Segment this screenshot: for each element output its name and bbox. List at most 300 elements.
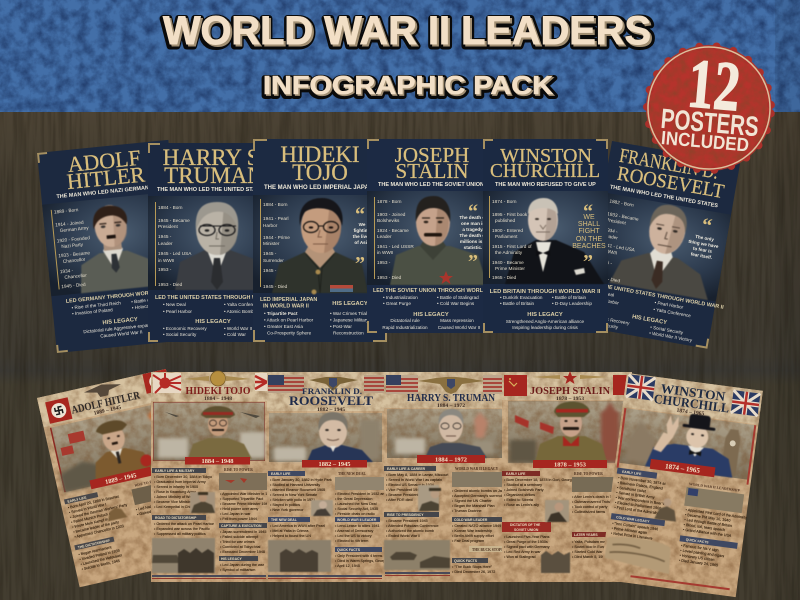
timeline: the Admiralty [495,250,523,255]
campaigns and legacy [583,281,724,347]
poster years: 1889 – 1945 [93,405,122,417]
poster name: ROOSEVELT [289,393,373,408]
medal ribbons [330,285,353,292]
flag: Soviet right [613,375,629,395]
campaigns and legacy: LED THE SOVIET UNION THROUGH WORLD WAR II [373,288,506,294]
timeline: 1934 - [60,268,74,274]
quote: a tragedy. [462,227,484,232]
small portrait [311,500,333,516]
poster title [163,145,265,188]
timeline: Surrender [263,258,284,263]
timeline: 1882 - Born [609,199,634,208]
right column text: • Social Security Act, 1935 [335,507,378,511]
group photo [152,538,215,573]
timeline: 1889 - Born [54,207,79,215]
poster name: FRANKLIN D. [302,386,362,396]
timeline: 1945 - [263,251,277,256]
right column text: • Led through Battle of Britain [684,518,732,528]
group photo [541,551,570,573]
badge number: 12 [685,45,743,126]
left column text: • Won at Stalingrad [504,555,536,559]
left column text: • Launched Five-Year Plans [504,535,550,539]
timeline: in WWII [158,258,174,263]
poster title: CHURCHILL [490,160,600,182]
right column text: • Symbol of militarism [220,568,255,572]
left column text: • Served in New York Senate [270,493,317,497]
portrait [645,409,740,478]
right column text: • After Lenin's death in 1924 [572,495,618,499]
subtitle: INFOGRAPHIC PACK [263,70,553,100]
left column text: • Born January 30, 1882 in Hyde Park [270,478,332,482]
timeline: in WWII [600,248,617,256]
left column text: SOVIET UNION [514,528,539,532]
timeline: 1945 - Became [158,218,190,223]
portrait [505,198,604,284]
date ribbon [650,459,715,477]
timeline [51,206,95,290]
scene [508,401,626,463]
poster name [653,380,732,416]
poster tagline: THE MAN WHO LED THE UNITED STATES [609,184,719,209]
campaigns and legacy: IN WORLD WAR II [263,304,309,310]
footer stripe [152,575,266,579]
campaigns and legacy: HIS LEGACY [631,314,668,326]
timeline: 1941 - Led USA [601,242,636,253]
right column text: • Appointed First Lord of the Admiralty [685,508,747,520]
poster title: TOJO [292,160,348,185]
timeline: 1924 - Became [377,228,409,233]
poster years: 1882 – 1945 [317,407,345,413]
left column text: • Joined Bolshevik Party [504,488,544,492]
campaigns and legacy: • Pearl Harbor [163,309,192,314]
left column text: • Joined Ministry of War [154,495,193,499]
left column text: • Exiled to Siberia [504,498,534,502]
campaigns and legacy: Dictatorial rule [390,318,420,323]
timeline: Nazi Party [61,242,84,249]
date ribbon: 1882 – 1945 [319,461,350,468]
timeline: Harbor [263,223,278,228]
campaigns and legacy: Reconstruction [333,330,364,336]
right column text: • Loved painting and cigars [680,548,725,558]
right column text: • Korean War leadership [452,529,492,533]
left column text: • Expanded war across the Pacific [154,527,210,531]
right column text: • Honorary US citizen [679,553,715,562]
campaigns and legacy [66,288,179,342]
timeline: Leader [158,241,173,246]
left column text: • New York governor [270,508,304,512]
right column text: • April 12, 1945 [335,564,360,568]
poster title [490,145,600,182]
portrait [307,412,373,462]
left column text: • Served in World War I as captain [386,478,442,482]
right column text: • Led Japan in war [220,512,251,516]
poster title: JOSEPH [395,143,469,167]
campaigns and legacy: • Greater East Asia [264,324,303,329]
poster: Joseph Stalin parchment [502,371,632,582]
timeline: 1900 - Entered [492,228,523,233]
poster: Hideki Tojo parchment [151,371,273,582]
timeline [155,202,192,287]
poster tagline: THE MAN WHO LED THE SOVIET UNION [378,182,484,188]
right column text: • Became PM May 10, 1940 [685,513,731,523]
left column text: • Born November 30, 1874 at [618,476,666,486]
timeline: 1945 - [599,259,613,266]
left column text: • Led America in WWII after Pearl [270,524,325,528]
campaigns and legacy: LED THE UNITED STATES THROUGH WORLD WAR II [155,295,291,301]
campaigns and legacy: • Battle of Britain [500,301,534,306]
right column text: • Led Japan during the war [220,563,265,567]
campaigns and legacy: • New Deal [163,302,186,307]
timeline: 1944 - Prime [263,235,290,240]
timeline: 1945 - Died [596,274,621,284]
timeline: 1953 - Died [158,282,183,287]
left column text: • Vice President 1945 [386,488,421,492]
date ribbon [89,467,152,489]
right column text: • Blood, toil, tears speech [683,523,725,532]
right column text: • Grand Alliance with the USA [683,528,732,538]
poster: Adolf Hitler dark [37,140,188,353]
right column text: RISE TO POWER [574,472,603,476]
poster title: HIDEKI [280,142,360,167]
right column text: • Executed December 1948 [220,550,265,554]
campaigns and legacy: HIS LEGACY [527,312,563,318]
early life column: • Became leader of the party [73,520,119,534]
right column text: • Died January 24, 1965 [679,558,718,568]
right column text: QUICK FACTS [454,559,478,563]
campaigns and legacy: • Tripartite Pact [264,311,298,316]
left column text: • Helped to found the UN [270,534,311,538]
early life column: • Joined the German Workers' Party [70,503,128,520]
campaigns and legacy: • Atomic Bomb [224,309,254,314]
soviet star [439,271,453,284]
scene [50,401,183,492]
timeline: 1915 - First Lord of [492,244,532,249]
left column text: • First Lord of the Admiralty [614,506,659,515]
left column text: • Born December 30, 1884 in Tokyo [154,475,212,479]
timeline: 1920 - Founded [57,235,90,243]
timeline: 1941 - Led USSR [377,244,414,249]
right column text: • Died March 5, 1953 [572,555,606,559]
poster tagline: THE MAN WHO LED THE UNITED STATES [157,187,267,193]
poster tagline: THE MAN WHO LED IMPERIAL JAPAN [264,185,373,191]
left column text [502,471,576,559]
right column text: • Led the US to victory [335,534,372,538]
timeline: published [495,218,515,223]
campaigns and legacy: Inspiring leadership during crisis [512,325,579,330]
right column text [219,468,273,572]
left column text: • Attended Potsdam Conference [386,524,439,528]
campaigns and legacy: • Social Security [163,332,197,337]
campaigns and legacy: • Attack on Pearl Harbor [264,318,314,322]
right column text: • Soviet bloc in Europe [572,545,609,549]
left column text: • Ended World War II [386,534,420,538]
quote: one man is [461,221,485,226]
date ribbon [533,460,607,468]
timeline: 1945 - Led USA [158,251,192,256]
star emblem [532,371,608,384]
right column text: • Died in Warm Springs, Georgia [335,559,389,563]
right column text: • the Great Depression [335,497,372,501]
left column text: • Sandhurst cadet [617,486,646,493]
right column text: • Japan surrendered in 1945 [220,530,266,534]
quote: millions is a [460,239,487,244]
campaigns and legacy: • Holocaust [132,303,156,310]
right column text: RISE TO POWER [224,468,253,472]
portrait [535,402,607,462]
timeline [374,197,414,280]
timeline: 1953 - [158,267,172,272]
left column text: • War correspondent in Boer War [615,496,670,507]
right column text: • Supported Tripartite Pact [220,497,263,501]
left column text: • Became President [386,493,418,497]
portrait [188,406,252,459]
timeline: 1884 - Born [158,205,183,210]
right column text: • Created NATO alliance 1949 [452,524,501,528]
left column text: • Served in British Army [616,491,655,500]
left column text: EARLY LIFE & MILITARY [155,469,195,473]
right column text: • Truman Doctrine [452,509,482,513]
imperial emblem [184,371,251,386]
campaigns and legacy: • Battle of Stalingrad [437,295,479,300]
timeline: 1940 - Became [492,260,524,265]
quote: fighting [354,228,371,233]
campaigns and legacy: • New Deal [591,289,615,298]
poster title: FRANKLIN D. [618,145,720,184]
right column text [572,472,622,559]
footer stripe [268,575,382,579]
left column text: • Stayed in politics [270,503,300,507]
campaigns and legacy: • Yalta Conference [224,302,262,307]
timeline: Chancellor [63,257,86,264]
left column text: • Graduated from Imperial Army [154,480,206,484]
right column text: • Arsenal of Democracy [335,529,374,533]
campaigns and legacy [155,295,291,337]
left column text: EARLY LIFE [506,472,526,476]
campaigns and legacy: • Pearl Harbor [654,300,684,310]
badge words: POSTERS [660,103,760,142]
quote: “ [468,201,478,223]
poster: Winston Churchill parchment [600,373,764,597]
footer stripe [385,572,450,576]
subtitle: INFOGRAPHIC PACK [263,72,555,102]
date ribbon: 1878 – 1953 [554,462,586,468]
scene [269,413,382,462]
portrait [83,414,156,485]
left column text: • Authorized the atomic bomb [386,529,434,533]
campaigns and legacy: HIS LEGACY [195,319,231,325]
poster name [289,386,373,408]
left column text: • Suppressed all military politics [154,532,206,536]
timeline [489,196,532,280]
campaigns and legacy: Mass repression [440,318,474,323]
quote: The only [695,234,715,242]
timeline: Leader [377,234,392,239]
left column text: EARLY LIFE & CAREER [387,467,426,471]
left column text: • Elected US Senator in 1934 [386,483,434,487]
flag: American left [268,375,304,393]
campaigns and legacy [260,297,370,336]
timeline: 1965 - Died [492,275,517,280]
right column text: COLD WAR LEADER [454,518,488,522]
right column text: • Elected to 4th term [335,539,368,543]
left column text: • Became Vice Minister [154,500,193,504]
left column text: • Born May 8, 1884 in Lamar, Missouri [386,473,449,477]
campaigns and legacy: • Pearl Harbor [590,296,620,306]
campaigns and legacy: HIS LEGACY [332,301,368,307]
portrait [390,196,487,285]
quote [572,201,606,273]
campaigns and legacy [490,289,601,330]
right column text: • Appointed War Minister in 1940 [220,492,273,496]
timeline: 1933 - Became [607,211,639,222]
right column text: • Collectivized farms [572,510,605,514]
scene [387,409,502,458]
poster title: WINSTON [500,145,592,167]
left column text: • Nobel Prize in Literature [611,531,653,541]
poster: Winston Churchill dark [483,139,608,333]
right column text: • Only President with 4 terms [335,554,383,558]
quote: The death of [459,233,487,238]
quote: thing we have [688,239,719,249]
campaigns and legacy: HIS LEGACY [413,312,449,318]
poster name: JOSEPH STALIN [530,386,610,397]
campaigns and legacy: LED THE UNITED STATES THROUGH WORLD WAR II [589,281,724,311]
eagle emblem [309,377,358,391]
poster years: 1884 – 1972 [437,403,465,409]
poster: Adolf Hitler parchment [37,369,208,587]
left column text [152,468,215,536]
right column text: • Fair Deal program [452,539,484,543]
quote: ” [583,251,593,273]
quote: statistic. [464,245,482,250]
poster title [64,145,146,194]
flag: right swastika banner [142,369,170,394]
title: WORLD WAR II LEADERS [163,11,653,55]
early life column: • Launched the Holocaust [80,553,122,566]
quote: WE [583,214,595,221]
right column text: THE BUCK STOPS [472,548,503,552]
left column text [268,471,332,538]
left column text: • "Iron Curtain" speech 1946 [612,521,658,531]
flag: American right [483,375,502,394]
quote: the lives [353,234,372,239]
left column text: EARLY LIFE [271,472,291,476]
early life column: • Appointed Chancellor in 1933 [74,524,124,539]
poster title: TRUMAN [164,163,264,188]
poster title: ADOLF [66,145,142,177]
left column text: EARLY LIFE [622,470,642,476]
poster title [395,143,469,183]
timeline [260,199,290,289]
flag: American left [386,375,418,394]
timeline: 1941 - Pearl [263,216,289,221]
left column text: • Studied at Harvard University [270,483,320,487]
poster: Franklin Roosevelt parchment [267,372,389,582]
poster name: HARRY S. TRUMAN [407,393,496,404]
timeline: 1945 - [158,234,172,239]
right column text: QUICK FACTS [685,538,710,545]
campaigns and legacy: • Cold War Begins [437,301,475,306]
right column text: • Fireside chats on radio [335,512,375,516]
left column text [609,468,674,542]
campaigns and legacy: • Battle of Britain [131,296,166,304]
timeline: German Army [60,225,89,233]
right column text: CAPTURE & EXECUTION [221,524,262,528]
small portrait [654,497,679,522]
quote: ” [355,253,365,275]
campaigns and legacy: • Cold War [224,332,246,337]
right column text: • Took control of party [572,505,608,509]
timeline: 1895 - First book [492,212,528,217]
quote: ON THE [576,236,602,243]
tank photo [384,540,450,570]
campaigns and legacy: • World War II Victory [649,330,693,343]
flag: Union left [626,374,656,401]
right column text: • Berlin Airlift supply effort [452,534,494,538]
timeline: Parliament [495,234,518,239]
poster: Harry Truman parchment [384,372,508,582]
subtitle: INFOGRAPHIC PACK [264,72,555,102]
timeline: 1945 - Died [61,282,86,289]
poster: Franklin Roosevelt dark [579,141,749,350]
quote: BEACHES [572,243,606,250]
flag: rising sun left [153,373,181,393]
right column text: • Famous for his V sign [681,544,719,552]
campaigns and legacy: • Economic Recovery [163,326,207,331]
small portrait [545,500,569,522]
timeline: in WWII [377,250,393,255]
right column text [452,467,508,574]
campaigns and legacy: LED IMPERIAL JAPAN [260,297,317,303]
flag: rising sun right [255,373,267,391]
portrait [73,201,157,293]
poster years: 1874 – 1965 [676,408,705,417]
quote: “ [583,201,593,223]
badge words [658,103,760,157]
right column text: • Signed the UN Charter [452,499,492,503]
campaigns and legacy: • Post-War [330,324,352,329]
poster title: HITLER [66,161,146,194]
left column text: • Led Kempeitai in China [154,505,195,509]
left column text: • Elected to Parliament 1900 [615,501,661,511]
right column text: LATER YEARS [574,533,598,537]
right column text: • Lend-Lease to allies 1941 [335,524,380,528]
left column text: • Blenheim Palace, England [617,481,663,491]
campaigns and legacy: Strengthened Anglo-American alliance [506,319,585,324]
sandbags [604,534,673,574]
badge: 12 posters included [641,40,777,176]
right column text: • Held power over army [220,507,259,511]
footer stripe [630,575,730,590]
right column text [335,472,389,568]
scene [153,402,265,461]
campaigns and legacy: Caused World War II [438,325,480,330]
right column text: • Yalta, Potsdam meetings [572,540,615,544]
timeline: Bolsheviks [377,218,400,223]
rise to power column: • Gained mass support [137,505,174,517]
left column text: • Served in infantry in 1905 [154,485,198,489]
early life column: THE DICTATORSHIP [77,538,111,550]
right column text: THE NEW DEAL [338,472,366,476]
timeline: 1874 - Born [492,199,517,204]
left column text: • Born December 18, 1878 in Gori, Georgia [504,478,576,482]
left column text: • Stricken with polio in 1921 [270,498,315,502]
right column text: HIS LEGACY [221,557,242,561]
left column text: • After FDR died [386,498,412,502]
campaigns and legacy: Caused World War II [100,329,143,339]
quote: fear itself. [690,251,713,260]
campaigns and legacy: • Economic Recovery [586,313,630,326]
